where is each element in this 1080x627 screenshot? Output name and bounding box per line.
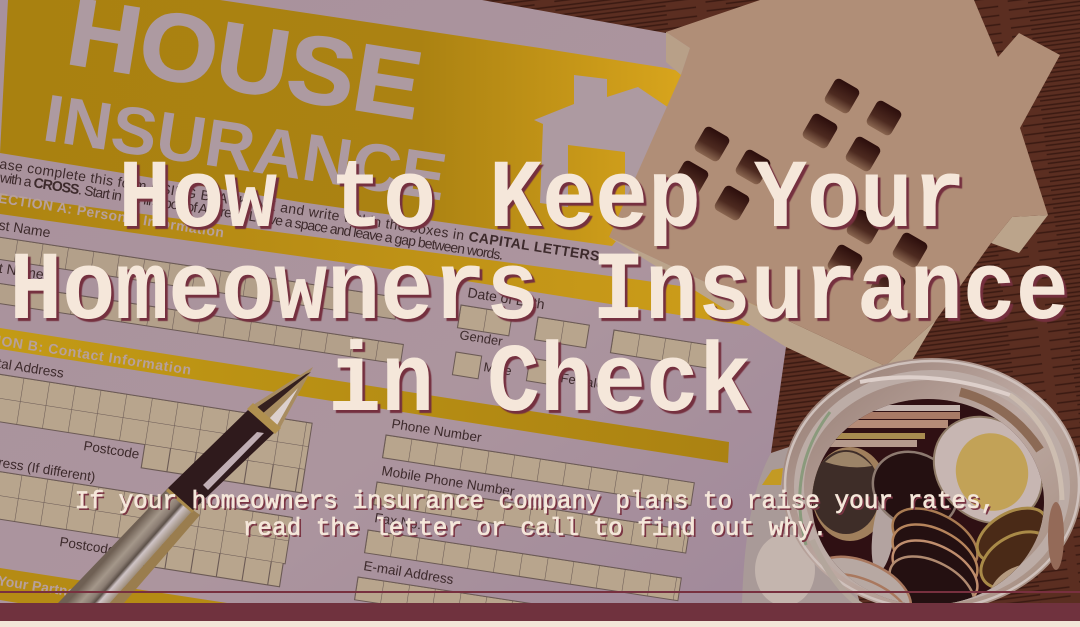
email boxes xyxy=(354,576,531,603)
pen xyxy=(58,367,313,603)
wood table xyxy=(482,0,1080,603)
yellow header band xyxy=(0,0,700,246)
dark coin xyxy=(812,447,888,541)
bimetal coin xyxy=(912,395,1064,545)
postcode label: Postcode xyxy=(83,438,140,462)
title line 3: in Check xyxy=(328,330,752,440)
house windows xyxy=(672,77,929,304)
last name boxes xyxy=(0,283,403,364)
first name boxes xyxy=(0,236,398,319)
wooden house side faces xyxy=(609,32,1048,400)
postal address boxes xyxy=(0,374,312,493)
gold coins right xyxy=(968,497,1061,600)
subtitle line 1: If your homeowners insurance company plans to raise your rates, xyxy=(75,489,995,516)
wooden house front xyxy=(609,0,1060,366)
header title INSURANCE: INSURANCE xyxy=(39,81,451,216)
paper form sheet xyxy=(0,0,820,603)
gender boxes xyxy=(452,351,598,388)
fax number boxes xyxy=(365,530,681,601)
title line 2: Homeowners Insurance xyxy=(9,238,1069,348)
thin rule xyxy=(0,591,1080,593)
section B band xyxy=(0,328,729,463)
different address boxes xyxy=(0,471,292,587)
email label: E-mail Address xyxy=(363,558,455,587)
subtitle xyxy=(75,489,995,543)
glass jar body xyxy=(742,358,1080,612)
jar lower rim highlights xyxy=(812,540,862,606)
cream footer strip xyxy=(0,621,1080,627)
copper lower left coins xyxy=(803,543,921,627)
section A band xyxy=(0,195,800,326)
gender boxes: Female xyxy=(560,370,605,392)
copper upright coin xyxy=(1048,502,1064,570)
second postcode label: Postcode xyxy=(59,534,116,558)
partner section band xyxy=(0,568,227,603)
bottom band xyxy=(0,603,1080,621)
icon: house on header xyxy=(534,75,672,210)
mobile number boxes xyxy=(373,482,689,553)
date of birth boxes xyxy=(457,305,713,368)
fax number label: Fax No. xyxy=(374,510,423,532)
tan coin xyxy=(981,554,1063,626)
title line 1: How to Keep Your xyxy=(118,146,966,256)
date of birth label: Date of Birth xyxy=(467,284,546,312)
gender label: Gender xyxy=(459,327,504,349)
coin stack xyxy=(825,405,960,447)
title xyxy=(9,146,1069,440)
middle coin stack xyxy=(859,437,988,627)
silver upright coin xyxy=(867,487,901,573)
phone number label: Phone Number xyxy=(391,416,483,445)
subtitle line 2: read the letter or call to find out why. xyxy=(243,516,827,543)
gender boxes: Male xyxy=(483,359,513,378)
mobile number label: Mobile Phone Number xyxy=(381,463,516,499)
coins inside jar xyxy=(800,390,1064,627)
phone number boxes xyxy=(382,435,694,505)
